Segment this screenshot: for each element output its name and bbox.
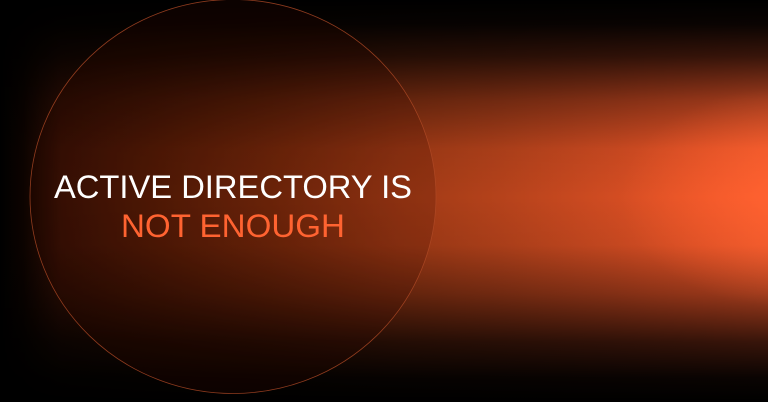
title bbox=[54, 169, 412, 244]
outlined circle bbox=[30, 0, 436, 394]
title line 2: NOT ENOUGH bbox=[121, 208, 345, 244]
title line 1: ACTIVE DIRECTORY IS bbox=[54, 169, 412, 205]
